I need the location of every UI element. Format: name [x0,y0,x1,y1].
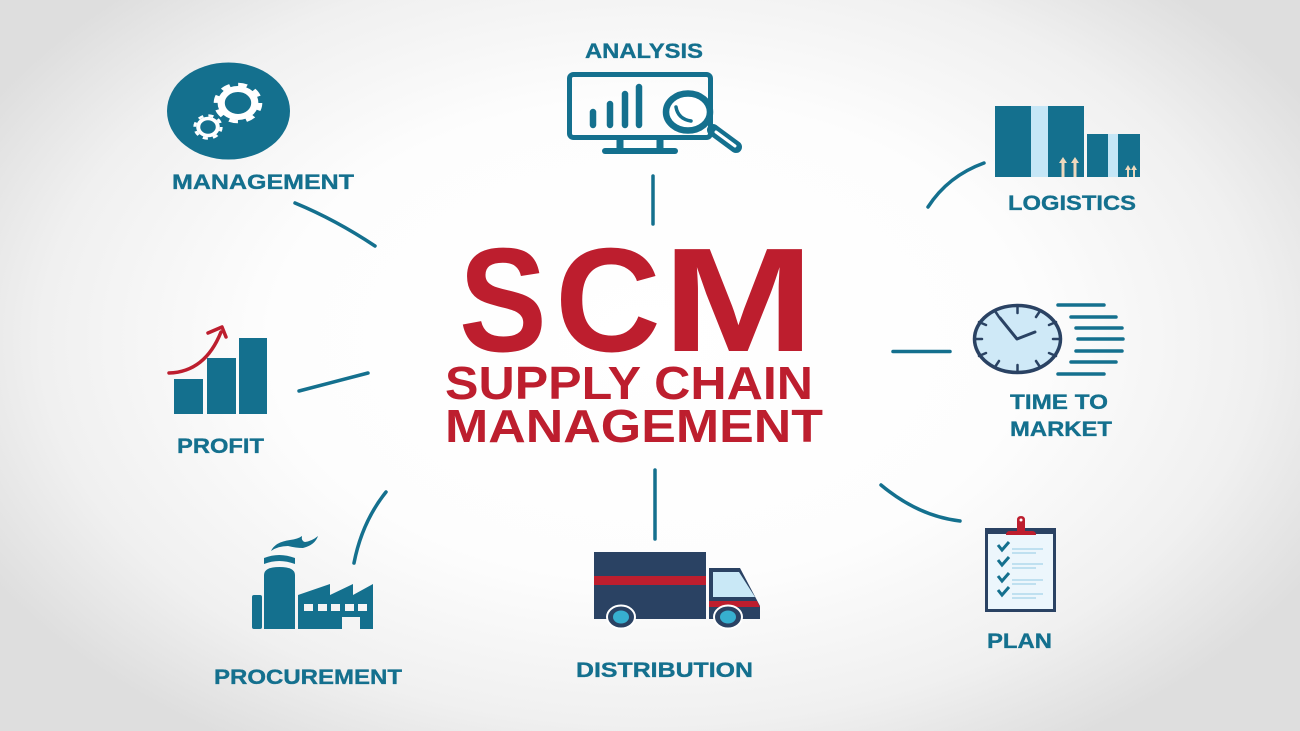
title: SCM: C [555,218,661,383]
label: distribution: DISTRIBUTION [576,659,753,682]
connector: time to market [893,350,950,353]
connector: management [295,203,375,246]
connector: procurement [354,492,386,563]
label: management: MANAGEMENT [172,171,354,194]
connector: analysis [651,176,655,224]
connector: plan [881,485,960,521]
icon: profit bar chart [169,327,267,414]
icon: plan clipboard [985,516,1056,610]
connector: distribution [653,470,657,539]
label: profit: PROFIT [177,435,264,458]
title: SCM: M [662,218,814,383]
label: plan: PLAN [987,630,1052,653]
subtitle: supply chain: SUPPLY CHAIN [445,357,813,409]
label: time to: TIME TO [1010,391,1108,414]
title: SCM [459,217,814,383]
connector: logistics [928,163,984,207]
title: SCM: S [459,217,547,383]
subtitle: management: MANAGEMENT [445,400,823,452]
label: analysis: ANALYSIS [585,40,703,63]
icon: logistics containers [995,106,1140,177]
label: procurement: PROCUREMENT [214,666,402,689]
icon: distribution truck [594,552,760,628]
label: market: MARKET [1010,418,1112,441]
icon: analysis monitor and magnifier [570,74,736,151]
icon: management gears [167,62,290,160]
label: logistics: LOGISTICS [1008,192,1136,215]
icon: time to market clock [974,305,1123,374]
icon: procurement factory [252,536,373,629]
connector: profit [299,373,368,391]
